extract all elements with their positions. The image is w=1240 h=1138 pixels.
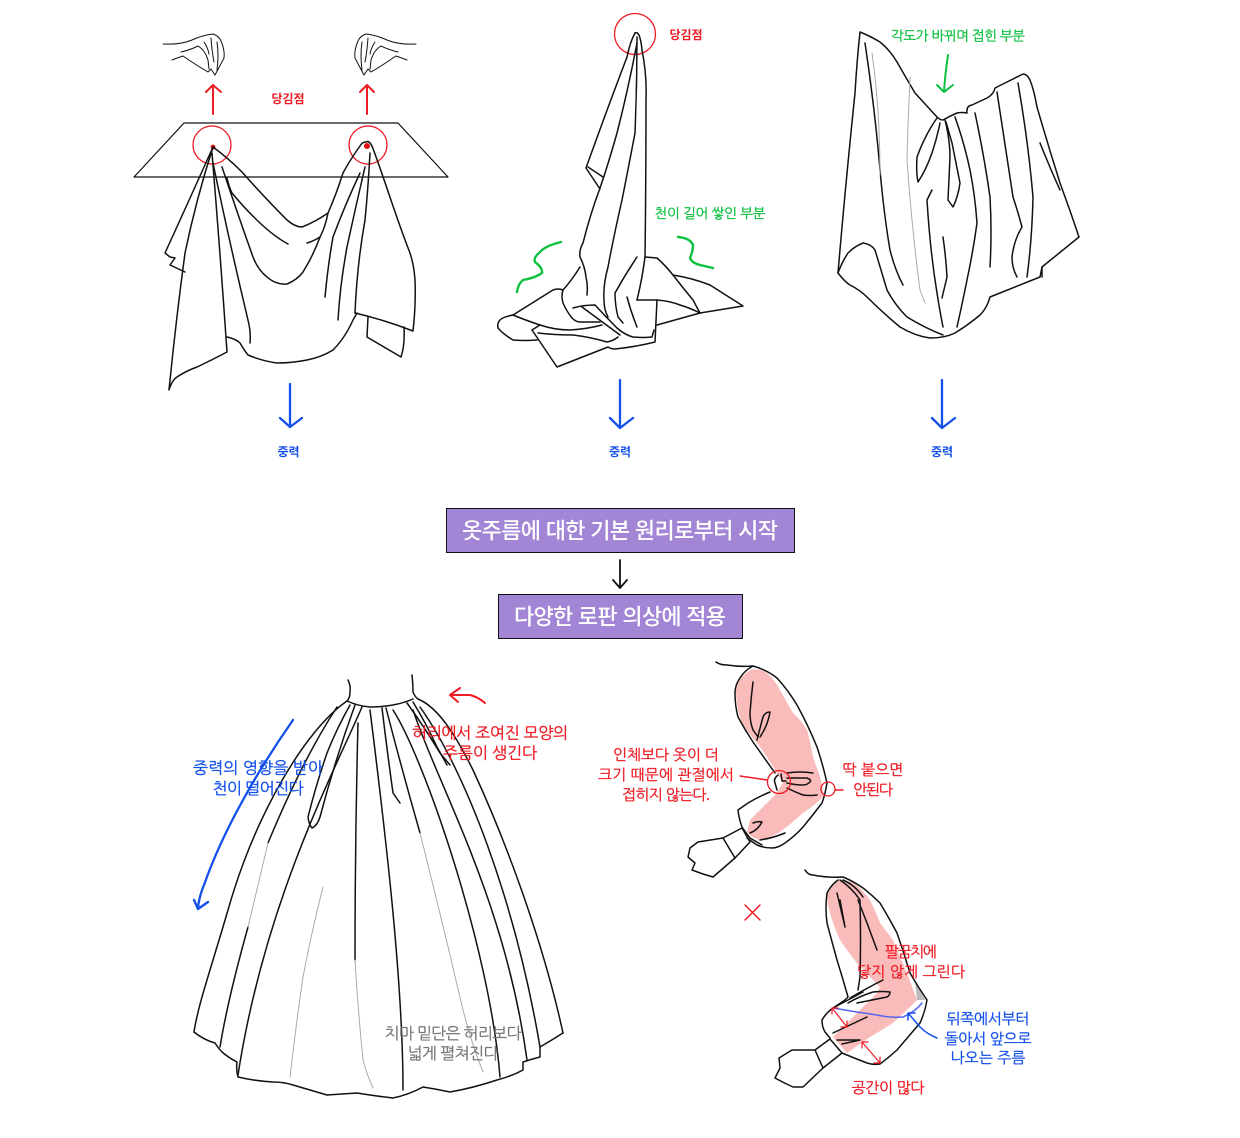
arrow: space left <box>832 1008 847 1027</box>
label: waist wrinkles: 허리에서 조여진 모양의 <box>412 724 568 742</box>
label: pull point: 당김점 <box>271 92 305 106</box>
arrow: folded part <box>937 55 953 92</box>
label: plenty of space: 공간이 많다 <box>852 1080 924 1097</box>
label: skirt hem spreads <box>384 1025 522 1063</box>
label: wrinkle from the back: 뒤쪽에서부터 <box>946 1011 1030 1028</box>
label: gravity effect <box>193 760 323 798</box>
panel: two pull points cloth <box>134 34 448 459</box>
label: do not touch elbow <box>857 944 965 981</box>
label: must not cling: 딱 붙으면 <box>842 762 904 779</box>
arrow: gravity <box>610 380 633 428</box>
pull point circle <box>614 14 656 54</box>
label: waist wrinkles: 주름이 생긴다 <box>443 744 537 762</box>
box: apply to various romance fantasy costumes <box>498 594 742 638</box>
label: wrinkle from the back: 나오는 주름 <box>950 1050 1026 1067</box>
cloth drawing <box>838 32 1079 338</box>
plane <box>134 123 448 177</box>
label: gravity: 중력 <box>931 445 953 459</box>
skirt drawing <box>194 675 563 1098</box>
box: start from basic principle <box>446 508 794 552</box>
arrow: gravity <box>280 384 302 427</box>
label: gravity effect: 중력의 영향을 받아 <box>193 760 323 778</box>
label: clothes bigger than body: 인체보다 옷이 더 <box>613 747 719 764</box>
arrow: left pull up <box>206 85 221 114</box>
label: do not touch elbow: 팔꿈치에 <box>885 944 937 961</box>
arrow: gravity <box>932 380 955 428</box>
icon: left hand pinching <box>163 34 224 75</box>
arm drawing <box>688 662 827 877</box>
label: gravity: 중력 <box>609 445 631 459</box>
pull point circles <box>193 126 387 164</box>
label: piled cloth: 천이 길어 쌓인 부분 <box>654 206 766 221</box>
sleeve shading <box>827 880 917 1053</box>
panel: wrong sleeve <box>775 870 1032 1097</box>
label: clothes bigger than body: 접히지 않는다. <box>622 787 710 804</box>
label: must not cling <box>842 762 904 799</box>
label: clothes bigger than body <box>598 747 734 804</box>
panel: angled fold cloth <box>838 28 1079 459</box>
arrow: flow down <box>613 560 627 588</box>
label: wrinkle from the back: 돌아서 앞으로 <box>944 1031 1032 1048</box>
icon: wrong mark <box>745 905 760 920</box>
marker: elbow circle inner <box>768 770 790 794</box>
arrow: wrap wrinkle pointer <box>908 1013 937 1038</box>
label: clothes bigger than body: 크기 때문에 관절에서 <box>598 767 734 784</box>
box: start from basic principle: 옷주름에 대한 기본 원리로부터 시작 <box>462 518 778 544</box>
cloth drawing <box>165 142 415 390</box>
label: skirt hem spreads: 넓게 펼쳐진다 <box>408 1045 498 1063</box>
label: do not touch elbow: 닿지 않게 그린다 <box>857 964 965 981</box>
label: folded part: 각도가 바뀌며 접힌 부분 <box>891 28 1025 44</box>
label: skirt hem spreads: 치마 밑단은 허리보다 <box>384 1025 522 1043</box>
cloth drawing <box>498 33 743 367</box>
grey shadow <box>915 980 925 1000</box>
box: apply to various romance fantasy costumes: 다양한 로판 의상에 적용 <box>514 604 726 630</box>
arrow: right pull up <box>360 85 374 114</box>
leader: inner elbow <box>740 776 767 780</box>
sleeve shading <box>736 669 823 840</box>
label: must not cling: 안된다 <box>853 782 893 799</box>
arm drawing <box>775 870 927 1087</box>
label: waist wrinkles <box>412 724 568 762</box>
squiggle: right <box>678 237 713 268</box>
label: wrinkle from the back <box>944 1011 1032 1067</box>
label: gravity: 중력 <box>277 445 300 459</box>
panel: skirt <box>193 675 568 1098</box>
squiggle: left <box>517 242 561 292</box>
panel: single pull point cloth <box>498 14 766 459</box>
arrow: gravity falling cloth <box>194 720 293 909</box>
label: pull point: 당김점 <box>669 28 703 42</box>
label: gravity effect: 천이 떨어진다 <box>212 780 304 798</box>
arrow: space right <box>862 1042 880 1063</box>
leader: outer elbow <box>835 789 843 791</box>
arrow: cinched waist <box>450 688 485 703</box>
icon: right hand pinching <box>355 34 416 75</box>
marker: elbow circle outer <box>821 782 835 796</box>
panel: correct sleeve <box>598 662 904 877</box>
wrap wrinkle line <box>833 1003 922 1017</box>
